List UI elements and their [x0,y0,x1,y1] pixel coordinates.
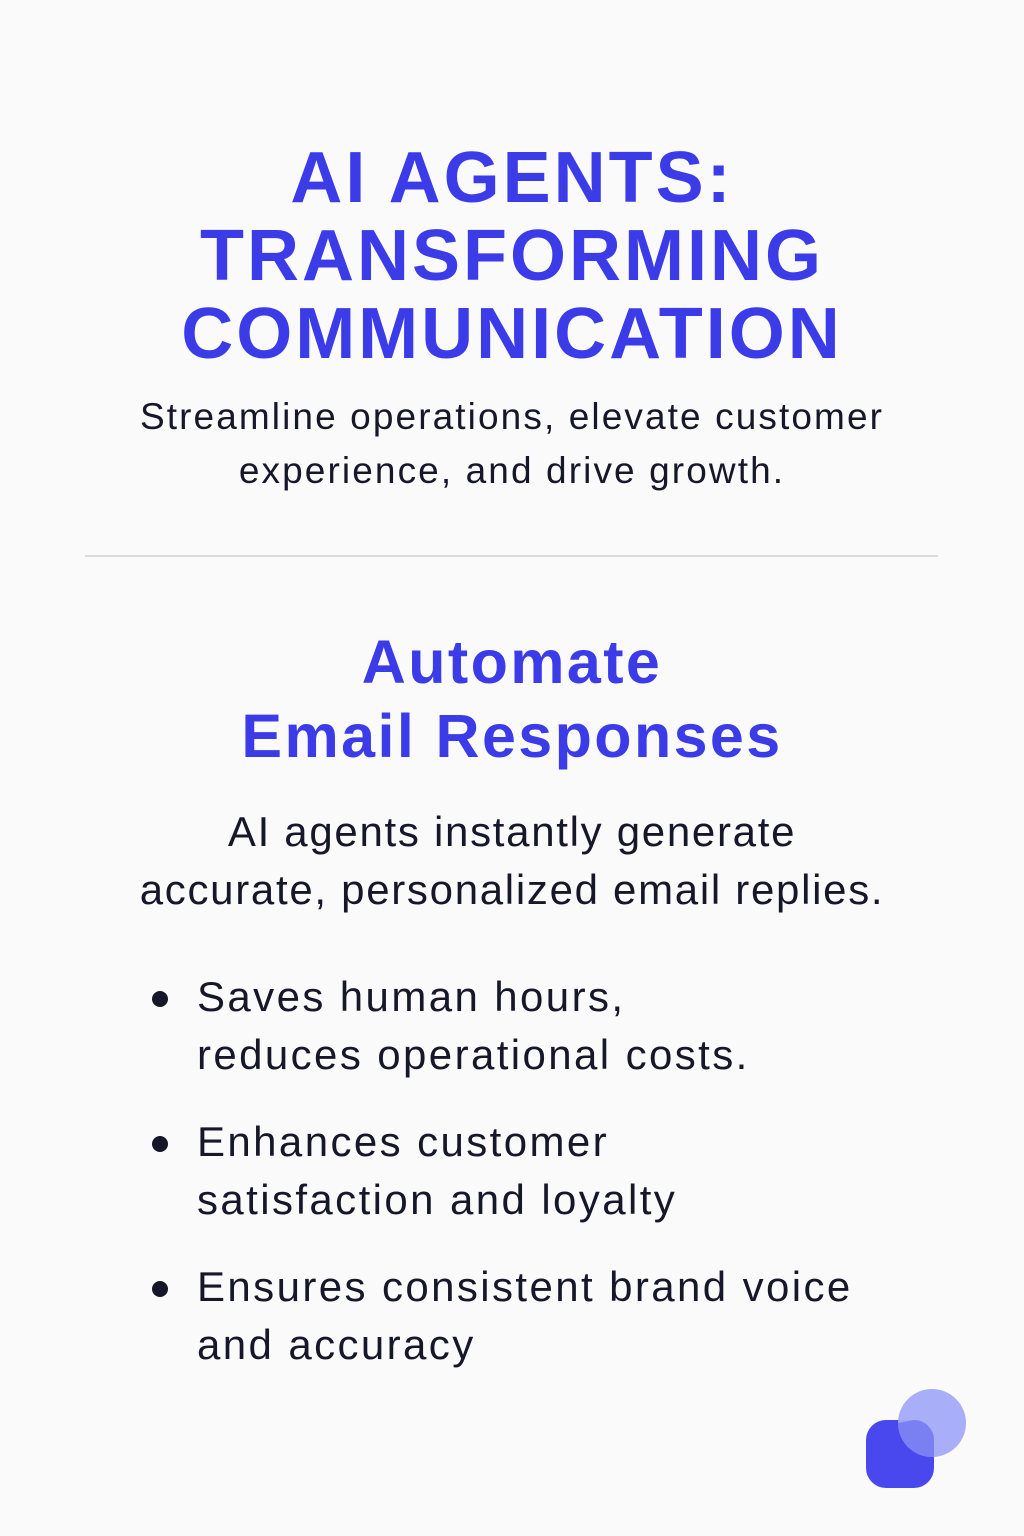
bullet 2 [152,1118,677,1223]
subtitle: experience, and drive growth. [239,450,785,491]
icon: logo [866,1389,966,1488]
section heading [241,628,783,770]
section description: accurate, personalized email replies. [140,866,884,913]
section heading: Automate [362,628,662,696]
bullet 2: Enhances customer [197,1118,609,1165]
bullet list [152,973,853,1368]
bullet 2: satisfaction and loyalty [197,1176,677,1223]
subtitle: Streamline operations, elevate customer [140,396,884,437]
title: AI AGENTS: [290,138,734,218]
title: COMMUNICATION [181,294,843,374]
section heading: Email Responses [241,702,783,770]
bullet 1 [152,973,750,1078]
title: TRANSFORMING [200,216,824,296]
subtitle [140,396,884,491]
bullet 3: Ensures consistent brand voice [197,1263,853,1310]
bullet 3 [152,1263,853,1368]
section description [140,808,884,913]
section description: AI agents instantly generate [228,808,796,855]
bullet 1: reduces operational costs. [197,1031,750,1078]
bullet 3: and accuracy [197,1321,476,1368]
title [181,138,843,374]
bullet 1: Saves human hours, [197,973,625,1020]
